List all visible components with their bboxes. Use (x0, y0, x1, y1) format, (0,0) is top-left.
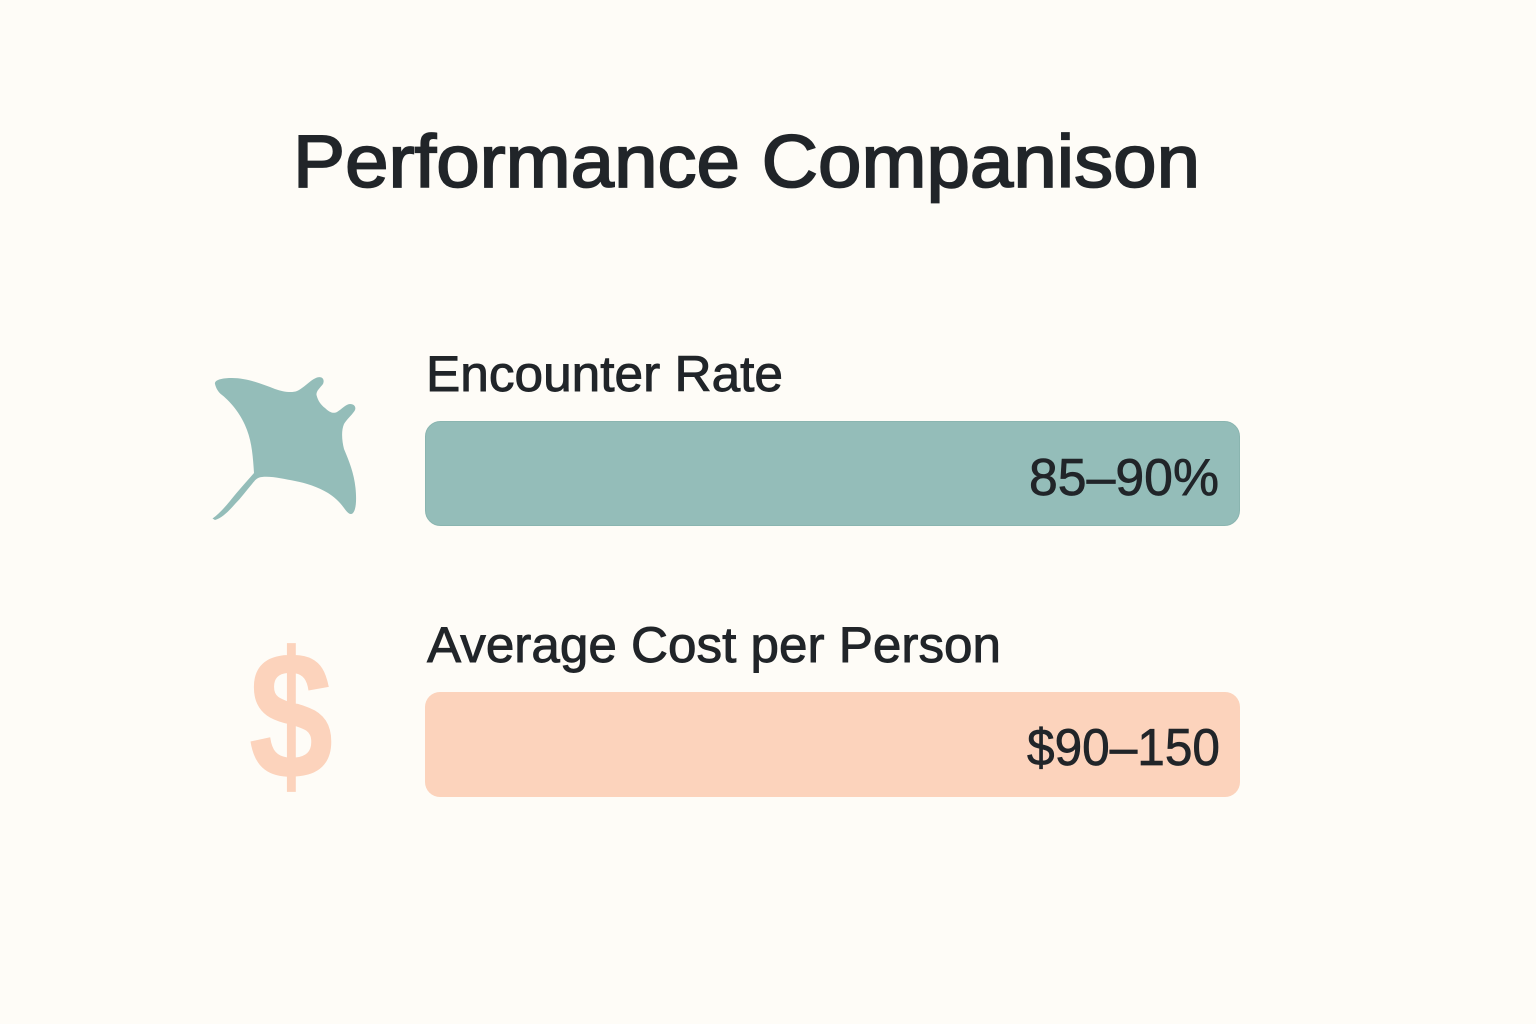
row: encounter rate (426, 346, 1240, 526)
bar: encounter rate (426, 422, 1240, 526)
label: average cost per person: Average Cost per Person (427, 617, 1001, 673)
value: average cost: $90–150 (1027, 719, 1220, 777)
title: Performance Companison (293, 120, 1200, 203)
row: average cost per person (425, 617, 1240, 797)
label: encounter rate: Encounter Rate (426, 346, 783, 402)
value: encounter rate: 85–90% (1029, 449, 1219, 507)
icon: manta ray (212, 377, 356, 520)
icon: dollar sign: $ (249, 615, 333, 817)
bar: average cost (425, 692, 1240, 797)
